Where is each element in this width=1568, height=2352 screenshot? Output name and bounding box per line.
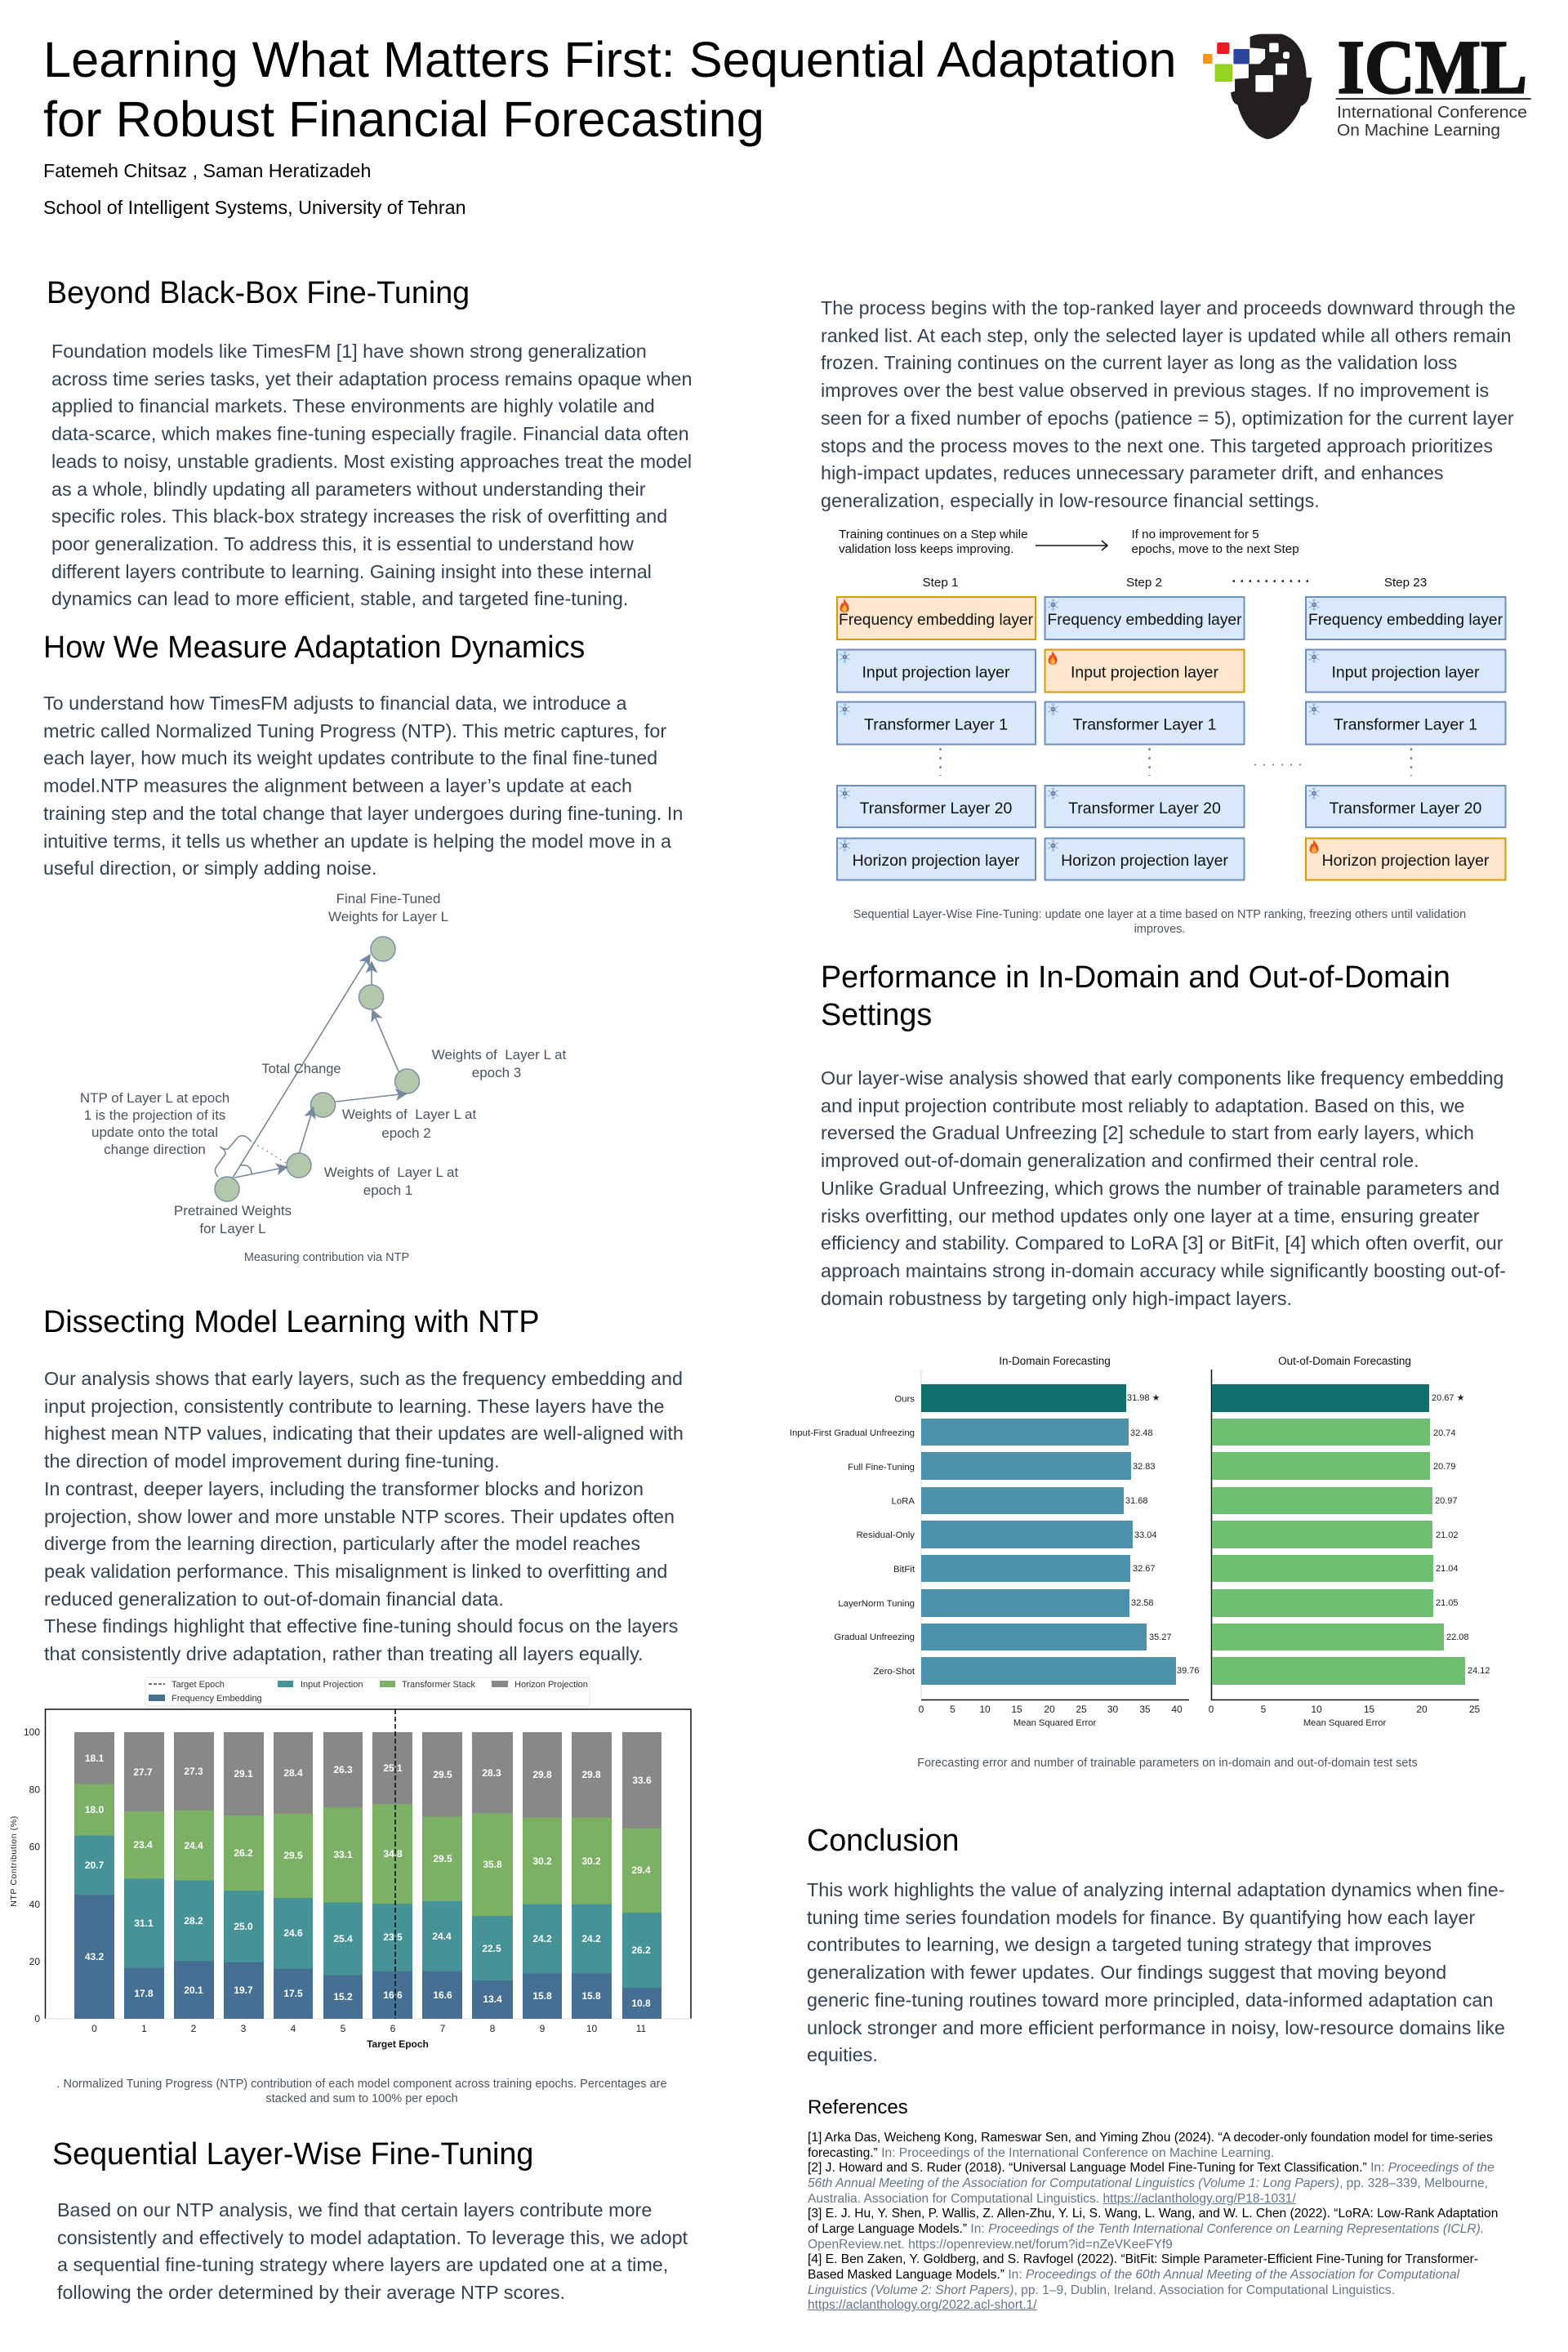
- text: Sequential: [57, 2199, 688, 2303]
- value labels: 24.12: [1468, 1666, 1490, 1676]
- y axis labels: 100: [24, 1726, 40, 1738]
- text: How We Measure: training step and the total change that layer undergoes during fine-tuning. In: [43, 803, 683, 824]
- x tick labels: 15: [1011, 1704, 1022, 1715]
- bar value labels: 24.6: [283, 1927, 303, 1939]
- category labels: LoRA: [892, 1496, 915, 1506]
- text: How We Measure: each layer, how much its weight updates contribute to the final fine-tuned: [43, 747, 657, 768]
- chart titles: In-Domain Forecasting: [999, 1355, 1111, 1367]
- bar value labels: 25.1: [383, 1762, 403, 1774]
- node: epoch 3: [395, 1069, 420, 1094]
- caption: MSE chart: Forecasting error and number of trainable parameters on in-domain and out-of-domain test sets: [917, 1757, 1418, 1770]
- bar value labels: 25.0: [234, 1921, 253, 1932]
- text: Performance: efficiency and stability. Compared to LoRA [3] or BitFit, [4] which often overfit, our: [821, 1232, 1503, 1254]
- y axis labels: 0: [34, 2013, 40, 2025]
- diagram labels: [80, 891, 566, 1236]
- x tick labels: 5: [1261, 1704, 1267, 1715]
- bar value labels: 29.5: [433, 1769, 452, 1780]
- text: Dissecting: the direction of model improvement during fine-tuning.: [44, 1450, 500, 1472]
- bar value labels: 26.2: [631, 1944, 651, 1956]
- y axis labels: 60: [29, 1841, 40, 1852]
- x tick labels: 30: [1107, 1704, 1118, 1715]
- diagram labels: change direction: [104, 1142, 206, 1157]
- value labels: 33.04: [1134, 1530, 1157, 1540]
- node: epoch 1: [287, 1153, 311, 1178]
- x axis labels: 10: [586, 2023, 597, 2034]
- x tick labels: 5: [950, 1704, 956, 1715]
- title: [43, 31, 1176, 147]
- instruction: patience: [1132, 528, 1299, 556]
- diagram labels: 1 is the projection of its: [84, 1107, 225, 1123]
- x tick labels: 15: [1364, 1704, 1374, 1715]
- text: Conclusion: generalization with fewer updates. Our findings suggest that moving beyond: [807, 1962, 1446, 1983]
- text: Performance: domain robustness by targeting only high-impact layers.: [821, 1288, 1292, 1309]
- caption: NTP chart: stacked and sum to 100% per epoch: [265, 2092, 458, 2105]
- x axis labels: 0: [91, 2023, 97, 2034]
- column: step 23: Frequency embedding layer: [1308, 611, 1503, 629]
- node: epoch 2: [310, 1093, 335, 1117]
- column: step 23: Input projection layer: [1331, 663, 1480, 681]
- x tick labels: 0: [919, 1704, 924, 1715]
- out-of-domain bars: [1212, 1384, 1465, 1685]
- references list: [2] J. Howard and S. Ruder (2018). “Universal Language Model Fine-Tuning for Text Classification.” In: Proceedings of the: [808, 2161, 1494, 2175]
- x axis labels: 6: [390, 2023, 396, 2034]
- diagram labels: NTP of Layer L at epoch: [80, 1090, 229, 1106]
- text: Performance: improved out-of-domain generalization and confirmed their central role.: [821, 1150, 1419, 1171]
- caption: NTP diagram: Measuring contribution via NTP: [244, 1251, 409, 1264]
- text: Dissecting: peak validation performance. This misalignment is linked to overfitting and: [44, 1561, 667, 1582]
- value labels: 20.79: [1433, 1462, 1456, 1472]
- caption: flow figure: improves.: [1134, 923, 1185, 936]
- text: Performance: reversed the Gradual Unfreezing [2] schedule to start from early layers, which: [821, 1122, 1474, 1143]
- category labels: Input-First Gradual Unfreezing: [790, 1428, 915, 1438]
- text: Conclusion: generic fine-tuning routines toward more principled, data-informed adaptation can: [807, 1989, 1493, 2011]
- text: Sequential: following the order determined by their average NTP scores.: [57, 2282, 565, 2303]
- dotted separator between columns: [1254, 764, 1308, 766]
- heading: Beyond Black-Box Fine-Tuning: Beyond Black-Box Fine-Tuning: [47, 275, 470, 310]
- text: How We Measure: To understand how TimesFM adjusts to financial data, we introduce a: [43, 693, 626, 714]
- references list: OpenReview.net. https://openreview.net/forum?id=nZeVKeeFYf9: [808, 2238, 1173, 2252]
- icon: ICML logo: [1203, 25, 1531, 140]
- value labels: 31.68: [1125, 1496, 1148, 1506]
- instruction: training continues: [839, 528, 1028, 556]
- bar value labels: 15.8: [581, 1990, 601, 2002]
- column: step 2: Horizon projection layer: [1061, 852, 1228, 870]
- bar value labels: 33.6: [632, 1775, 652, 1786]
- value labels: 20.67 ★: [1432, 1393, 1465, 1403]
- legend: Transformer Stack: [402, 1680, 476, 1690]
- bar value labels: 35.8: [483, 1859, 502, 1870]
- bar value labels: 29.8: [532, 1769, 552, 1780]
- references list: of Large Language Models.” In: Proceedings of the Tenth International Conference on Learning Representations (ICLR).: [808, 2222, 1484, 2236]
- x tick labels: 40: [1171, 1704, 1183, 1715]
- text: Beyond Black-Box: specific roles. This black-box strategy increases the risk of overfitting and: [51, 506, 667, 527]
- bar value labels: 34.8: [383, 1848, 403, 1860]
- text: How We Measure: intuitive terms, it tells us whether an update is helping the model move in a: [43, 831, 671, 852]
- text: process description: seen for a fixed number of epochs (patience = 5), optimization for the current layer: [821, 408, 1514, 429]
- step labels: Step 1: [923, 576, 958, 590]
- x tick labels: 35: [1139, 1704, 1151, 1715]
- text: Beyond Black-Box: Foundation models like TimesFM [1] have shown strong generalization: [51, 341, 647, 362]
- x axis labels: 5: [341, 2023, 346, 2034]
- text: Dissecting: [44, 1368, 684, 1664]
- text: Performance: risks overfitting, our method updates only one layer at a time, ensuring greater: [821, 1205, 1480, 1227]
- references list: [3] E. J. Hu, Y. Shen, P. Wallis, Z. Allen-Zhu, Y. Li, S. Wang, L. Wang, and W. L. Chen (2022). “LoRA: Low-Rank Adaptation: [808, 2207, 1498, 2221]
- heading: Performance: [821, 960, 1450, 1031]
- node: intermediate weights: [359, 985, 384, 1009]
- bar value labels: 24.4: [184, 1840, 203, 1851]
- column: step 1: Transformer Layer 1: [864, 715, 1008, 733]
- value labels: 20.74: [1433, 1428, 1456, 1438]
- text: How We Measure: [43, 693, 683, 879]
- column: step 23: Transformer Layer 20: [1330, 800, 1482, 817]
- heading: References: References: [808, 2096, 908, 2118]
- diagram labels: Weights of Layer L at: [324, 1165, 458, 1180]
- text: Dissecting: that consistently drive adaptation, rather than treating all layers equally.: [44, 1643, 644, 1664]
- heading: How We Measure Adaptation Dynamics: How We Measure Adaptation Dynamics: [43, 630, 585, 664]
- text: process description: frozen. Training continues on the current layer as long as the validation loss: [821, 352, 1457, 373]
- plot frame: [46, 1709, 691, 2019]
- text: Beyond Black-Box: dynamics can lead to more efficient, stable, and targeted fine-tuning.: [51, 588, 628, 609]
- bar value labels: 33.1: [333, 1849, 353, 1860]
- diagram labels: for Layer L: [199, 1221, 266, 1236]
- text: Conclusion: equities.: [807, 2044, 878, 2065]
- category labels: LayerNorm Tuning: [838, 1599, 915, 1609]
- text: process description: The process begins with the top-ranked layer and proceeds downward through the: [821, 297, 1516, 318]
- references list: https://aclanthology.org/2022.acl-short.1/: [808, 2298, 1037, 2312]
- heading: Conclusion: Conclusion: [807, 1823, 959, 1857]
- bar value labels: 10.8: [631, 1998, 651, 2009]
- diagram labels: Total Change: [261, 1062, 341, 1076]
- text: Performance: approach maintains strong in-domain accuracy while significantly boosting out-of-: [821, 1260, 1506, 1281]
- text: Dissecting: These findings highlight that effective fine-tuning should focus on the layers: [44, 1615, 678, 1637]
- column: step 1: Transformer Layer 20: [860, 800, 1013, 817]
- instruction: training continues: Training continues on a Step while: [839, 528, 1028, 541]
- legend: Target Epoch: [172, 1680, 225, 1690]
- text: Beyond Black-Box: poor generalization. To address this, it is essential to understand how: [51, 533, 634, 555]
- icon: ICML logo: ICML: [1338, 25, 1527, 109]
- y axis labels: [24, 1726, 40, 2025]
- x tick labels: 10: [979, 1704, 991, 1715]
- axes: [920, 1370, 922, 1700]
- bar value labels: 15.8: [532, 1990, 552, 2002]
- text: Beyond Black-Box: as a whole, blindly updating all parameters without understanding their: [51, 479, 646, 500]
- x axis titles: Mean Squared Error: [1303, 1718, 1386, 1728]
- bar value labels: 28.4: [283, 1767, 303, 1779]
- column: step 2: Input projection layer: [1071, 663, 1219, 681]
- text: Beyond Black-Box: leads to noisy, unstable gradients. Most existing approaches treat the model: [51, 451, 692, 472]
- node: final weights: [371, 937, 395, 961]
- icon: ICML logo: International Conference: [1337, 104, 1527, 122]
- text: Beyond Black-Box: applied to financial markets. These environments are highly volatile and: [51, 395, 655, 416]
- text: Performance: and input projection contribute most reliably to adaptation. Based on this, we: [821, 1095, 1464, 1116]
- bar value labels: 18.1: [85, 1753, 105, 1764]
- caption: NTP chart: . Normalized Tuning Progress (NTP) contribution of each model component across training epochs. Percentages are: [56, 2078, 667, 2091]
- x axis title: Target Epoch: [367, 2038, 429, 2050]
- x axis titles: Mean Squared Error: [1013, 1718, 1096, 1728]
- bar value labels: 28.3: [482, 1767, 501, 1779]
- text: Dissecting: In contrast, deeper layers, including the transformer blocks and horizon: [44, 1478, 644, 1499]
- bar value labels: 28.2: [184, 1915, 203, 1927]
- legend: Horizon Projection: [514, 1680, 588, 1690]
- text: process description: [821, 297, 1516, 511]
- bar value labels: 15.2: [333, 1991, 353, 2002]
- x tick labels: [919, 1704, 1480, 1715]
- figure: NTP diagram: [80, 891, 567, 1236]
- text: Conclusion: [807, 1879, 1505, 2065]
- value labels: 22.08: [1446, 1633, 1469, 1642]
- text: Sequential: a sequential fine-tuning strategy where layers are updated one at a time,: [57, 2254, 668, 2275]
- heading: Performance: Settings: [821, 997, 932, 1031]
- bar value labels: 26.3: [333, 1764, 353, 1775]
- column: step 23: Horizon projection layer: [1322, 852, 1490, 870]
- text: How We Measure: metric called Normalized Tuning Progress (NTP). This metric captures, for: [43, 720, 666, 742]
- step labels: Step 2: [1126, 576, 1162, 590]
- y axis title: NTP Contribution (%): [9, 1815, 19, 1907]
- x axis labels: 1: [141, 2023, 147, 2034]
- diagram labels: epoch 3: [472, 1065, 521, 1080]
- column: step 1: Horizon projection layer: [853, 852, 1020, 870]
- column: step 2: Transformer Layer 1: [1073, 715, 1216, 733]
- x axis labels: 3: [241, 2023, 247, 2034]
- text: process description: stops and the process moves to the next one. This targeted approach prioritizes: [821, 435, 1493, 457]
- x axis labels: [91, 2023, 647, 2034]
- column: step 1: Input projection layer: [862, 663, 1010, 681]
- bar value labels: 22.5: [482, 1943, 501, 1954]
- arrow: move to next step: [1036, 541, 1107, 550]
- category labels: Full Fine-Tuning: [848, 1463, 915, 1472]
- bar value labels: 29.5: [283, 1850, 303, 1861]
- text: Dissecting: highest mean NTP values, indicating that their updates are well-aligned with: [44, 1423, 684, 1444]
- title: Learning What Matters First: Sequential Adaptation: [43, 31, 1176, 87]
- instruction: patience: If no improvement for 5: [1132, 528, 1259, 541]
- diagram labels: Weights of Layer L at: [342, 1107, 476, 1122]
- diagram labels: Final Fine-Tuned: [336, 891, 440, 906]
- value labels: 35.27: [1149, 1633, 1172, 1642]
- references list: [1] Arka Das, Weicheng Kong, Rameswar Sen, and Yiming Zhou (2024). “A decoder-only foundation model for time-series: [808, 2131, 1493, 2145]
- bar value labels: 17.5: [283, 1988, 303, 1999]
- stacked bars: [74, 1732, 662, 2019]
- text: Conclusion: This work highlights the value of analyzing internal adaptation dynamics when fine-: [807, 1879, 1505, 1900]
- bar value labels: 29.8: [581, 1769, 601, 1780]
- y axis labels: 80: [29, 1784, 40, 1795]
- value labels: 39.76: [1177, 1666, 1200, 1676]
- step labels: Step 23: [1384, 576, 1427, 590]
- bar value labels: 29.1: [234, 1768, 253, 1780]
- text: Beyond Black-Box: different layers contribute to learning. Gaining insight into these internal: [51, 561, 652, 582]
- references list: Australia. Association for Computational Linguistics. https://aclanthology.org/P18-1031/: [808, 2192, 1296, 2206]
- bar value labels: 19.7: [234, 1984, 253, 1996]
- step labels: [923, 576, 1427, 590]
- text: Dissecting: projection, show lower and more unstable NTP scores. Their updates often: [44, 1506, 675, 1527]
- x axis labels: 4: [291, 2023, 296, 2034]
- chart: NTP stacked bars: [9, 1677, 692, 2050]
- affiliation: School of Intelligent Systems, University of Tehran: [43, 197, 466, 218]
- chart: MSE horizontal bars: [790, 1355, 1490, 1728]
- column: step 1: [837, 597, 1036, 880]
- x axis labels: 7: [440, 2023, 446, 2034]
- value labels: 32.83: [1133, 1462, 1156, 1472]
- references list: [808, 2131, 1498, 2312]
- references list: Linguistics (Volume 2: Short Papers), pp. 1–9, Dublin, Ireland. Association for Computational Linguistics.: [808, 2283, 1395, 2297]
- bar value labels: 20.7: [85, 1860, 105, 1871]
- category labels: BitFit: [893, 1565, 915, 1575]
- x tick labels: 25: [1076, 1704, 1087, 1715]
- bar value labels: 27.7: [133, 1766, 153, 1778]
- bar value labels: 25.4: [333, 1933, 353, 1944]
- text: Beyond Black-Box: data-scarce, which makes fine-tuning especially fragile. Financial data often: [51, 423, 689, 444]
- heading: Sequential Layer-Wise Fine-Tuning: Sequential Layer-Wise Fine-Tuning: [52, 2136, 533, 2171]
- bar value labels: 17.8: [134, 1988, 154, 1999]
- authors: Fatemeh Chitsaz , Saman Heratizadeh: [43, 160, 371, 181]
- category labels: Ours: [894, 1395, 915, 1405]
- chart titles: Out-of-Domain Forecasting: [1278, 1355, 1411, 1367]
- bar value labels: 23.4: [133, 1839, 153, 1851]
- value labels: 21.05: [1436, 1598, 1459, 1608]
- category labels: Zero-Shot: [873, 1667, 915, 1677]
- column: step 2: [1045, 597, 1245, 880]
- arrows: [215, 955, 407, 1178]
- text: process description: high-impact updates, reduces unnecessary parameter drift, and enhances: [821, 462, 1444, 483]
- bar value labels: 26.2: [234, 1847, 253, 1859]
- category labels: [790, 1395, 915, 1677]
- bar value labels: 24.4: [432, 1931, 452, 1942]
- diagram labels: Weights for Layer L: [328, 909, 448, 924]
- dotted separator: [1233, 580, 1312, 582]
- column: step 2: Transformer Layer 20: [1068, 800, 1221, 817]
- x axis labels: 9: [540, 2023, 546, 2034]
- bar value labels: 24.2: [581, 1933, 601, 1944]
- x tick labels: 0: [1209, 1704, 1214, 1715]
- x tick labels: 20: [1416, 1704, 1428, 1715]
- node: pretrained: [215, 1177, 239, 1201]
- bar value labels: 24.2: [532, 1933, 552, 1944]
- x tick labels: 20: [1044, 1704, 1055, 1715]
- x tick labels: 10: [1311, 1704, 1322, 1715]
- text: Sequential: Based on our NTP analysis, we find that certain layers contribute more: [57, 2199, 652, 2221]
- text: Conclusion: unlock stronger and more efficient performance in noisy, low-resource domains like: [807, 2017, 1505, 2038]
- bar value labels: 18.0: [85, 1804, 105, 1815]
- bar value labels: 16.6: [383, 1989, 403, 2001]
- diagram labels: epoch 2: [381, 1125, 431, 1141]
- in-domain bars: [921, 1384, 1176, 1685]
- bar value labels: 30.2: [581, 1855, 601, 1867]
- references list: Based Masked Language Models.” In: Proceedings of the 60th Annual Meeting of the Association for Computational: [808, 2268, 1459, 2282]
- diagram labels: Pretrained Weights: [174, 1203, 292, 1218]
- text: Dissecting: Our analysis shows that early layers, such as the frequency embedding and: [44, 1368, 683, 1389]
- value labels: [1125, 1393, 1490, 1676]
- value labels: 21.02: [1436, 1530, 1459, 1540]
- bar value labels: 16.6: [433, 1989, 452, 2001]
- heading: Dissecting Model Learning with NTP: Dissecting Model Learning with NTP: [43, 1304, 539, 1339]
- text: Beyond Black-Box: [51, 341, 692, 609]
- text: process description: generalization, especially in low-resource financial settings.: [821, 490, 1320, 511]
- value labels: 32.48: [1130, 1428, 1153, 1438]
- text: Performance: [821, 1067, 1506, 1309]
- text: Dissecting: input projection, consistently contribute to learning. These layers have the: [44, 1396, 664, 1417]
- bar value labels: 31.1: [134, 1918, 154, 1929]
- instruction: patience: epochs, move to the next Step: [1132, 542, 1299, 556]
- references list: forecasting.” In: Proceedings of the International Conference on Machine Learning.: [808, 2146, 1274, 2160]
- text: process description: improves over the best value observed in previous stages. If no improvement is: [821, 380, 1489, 401]
- value labels: 20.97: [1435, 1496, 1458, 1506]
- value labels: 32.58: [1131, 1598, 1154, 1608]
- references list: 56th Annual Meeting of the Association for Computational Linguistics (Volume 1: Long Papers), pp. 328–339, Melbourne,: [808, 2176, 1488, 2190]
- legend: [145, 1677, 590, 1706]
- bar value labels: 30.2: [532, 1855, 552, 1867]
- x axis labels: 8: [490, 2023, 496, 2034]
- value labels: 21.04: [1436, 1564, 1459, 1574]
- text: Performance: Unlike Gradual Unfreezing, which grows the number of trainable parameters and: [821, 1178, 1499, 1199]
- caption: flow figure: Sequential Layer-Wise Fine-Tuning: update one layer at a time based on NTP ranking, freezing others until validation: [853, 908, 1466, 921]
- legend: Frequency Embedding: [172, 1694, 262, 1704]
- diagram labels: Weights of Layer L at: [432, 1047, 566, 1062]
- bar value labels: 20.1: [184, 1984, 203, 1996]
- bar value labels: 43.2: [85, 1951, 105, 1962]
- heading: Performance: Performance in In-Domain and Out-of-Domain: [821, 960, 1450, 994]
- text: Performance: Our layer-wise analysis showed that early components like frequency embedding: [821, 1067, 1503, 1089]
- text: Sequential: consistently and effectively to model adaptation. To leverage this, we adopt: [57, 2227, 688, 2248]
- value labels: 32.67: [1133, 1564, 1156, 1574]
- column: step 23: [1306, 597, 1506, 880]
- icon: ICML logo: On Machine Learning: [1337, 122, 1500, 140]
- bar value labels: 29.4: [631, 1864, 651, 1876]
- caption: NTP chart: [56, 2078, 667, 2105]
- category labels: Gradual Unfreezing: [834, 1633, 915, 1642]
- value labels: 31.98 ★: [1127, 1393, 1160, 1403]
- x axis labels: 2: [191, 2023, 197, 2034]
- x axis titles: [1013, 1718, 1386, 1728]
- bar value labels: 13.4: [483, 1993, 502, 2005]
- text: How We Measure: useful direction, or simply adding noise.: [43, 858, 376, 879]
- target epoch line: [394, 1709, 396, 2019]
- text: Dissecting: diverge from the learning direction, particularly after the model reaches: [44, 1533, 640, 1554]
- x tick labels: 25: [1469, 1704, 1480, 1715]
- x axis labels: 11: [636, 2023, 647, 2034]
- legend: Input Projection: [301, 1680, 363, 1690]
- column: step 23: Transformer Layer 1: [1334, 715, 1477, 733]
- text: process description: ranked list. At each step, only the selected layer is updated while all others remain: [821, 325, 1511, 346]
- text: Dissecting: reduced generalization to out-of-domain financial data.: [44, 1588, 504, 1610]
- bar value labels: 23.5: [383, 1931, 403, 1943]
- column: step 2: Frequency embedding layer: [1047, 611, 1242, 629]
- title: for Robust Financial Forecasting: [43, 91, 764, 147]
- caption: flow figure: [853, 908, 1466, 936]
- instruction: training continues: validation loss keeps improving.: [839, 542, 1013, 556]
- text: Conclusion: tuning time series foundation models for finance. By quantifying how each layer: [807, 1907, 1475, 1928]
- text: Conclusion: contributes to learning, we design a targeted tuning strategy that improves: [807, 1934, 1432, 1955]
- figure: sequential fine-tuning flow: [836, 528, 1506, 880]
- bar value labels: 29.5: [433, 1853, 452, 1864]
- diagram labels: epoch 1: [363, 1183, 412, 1198]
- bar value labels: [85, 1753, 652, 2009]
- text: How We Measure: model.NTP measures the alignment between a layer’s update at each: [43, 775, 632, 796]
- column: step 1: Frequency embedding layer: [839, 611, 1033, 629]
- diagram labels: update onto the total: [91, 1125, 218, 1140]
- text: Beyond Black-Box: across time series tasks, yet their adaptation process remains opaque when: [51, 368, 692, 390]
- bar value labels: 27.3: [184, 1766, 203, 1777]
- y axis labels: 40: [29, 1899, 40, 1910]
- category labels: Residual-Only: [856, 1530, 915, 1540]
- references list: [4] E. Ben Zaken, Y. Goldberg, and S. Ravfogel (2022). “BitFit: Simple Parameter-Efficient Fine-Tuning for Transformer-: [808, 2252, 1478, 2266]
- chart titles: [999, 1355, 1411, 1367]
- y axis labels: 20: [29, 1956, 40, 1967]
